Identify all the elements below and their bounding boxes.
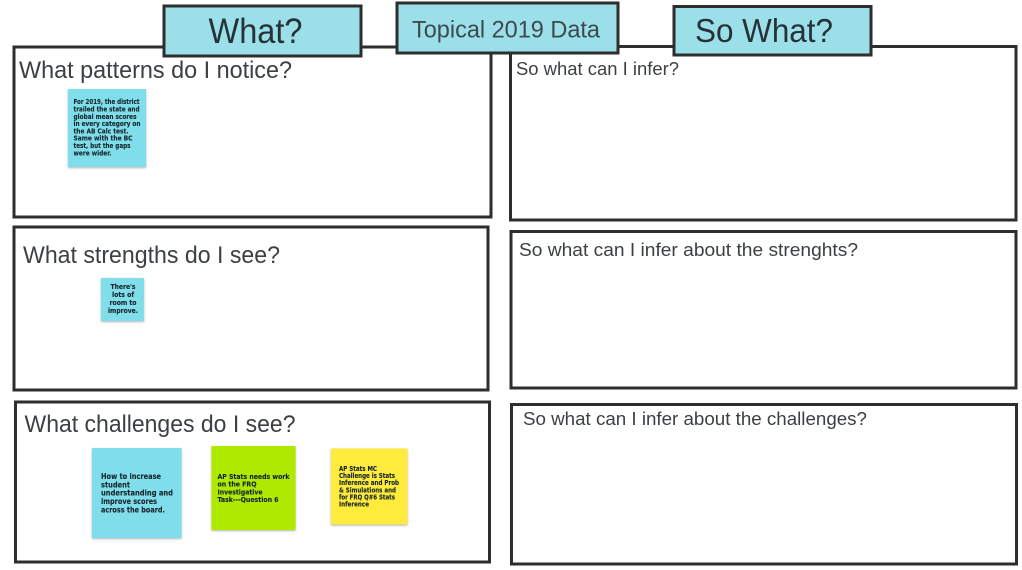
sticky note: FRQ question 6: Task---Question 6 — [218, 496, 279, 504]
sticky note: FRQ question 6: on the FRQ — [218, 481, 257, 489]
panel: infer about strengths — [511, 232, 1016, 388]
tab: So What?: So What? — [695, 12, 833, 49]
sticky note: room to improve — [101, 278, 144, 321]
sticky note: increase understanding: student — [101, 480, 130, 489]
sticky note: district trailed — [68, 89, 146, 167]
sticky note: stats MC challenge: Inference and Prob — [339, 479, 399, 487]
sticky note: stats MC challenge: & Simulations and — [339, 486, 396, 494]
sticky note: stats MC challenge — [331, 448, 408, 524]
sticky note: increase understanding: across the board. — [101, 505, 165, 514]
heading: what strengths: What strengths do I see? — [23, 242, 280, 269]
sticky note: FRQ question 6: Investigative — [218, 488, 263, 496]
panel: what strengths — [14, 227, 488, 390]
sticky note: room to improve: room to — [110, 299, 137, 307]
sticky note: increase understanding — [92, 448, 182, 538]
heading: what patterns: What patterns do I notice? — [19, 57, 292, 84]
sticky note: stats MC challenge: Inference — [339, 500, 369, 508]
tab: So What? — [674, 6, 871, 55]
sticky note: district trailed: Same with the BC — [74, 135, 133, 143]
panel: infer about challenges — [512, 404, 1016, 564]
sticky note: district trailed: trailed the state and — [74, 105, 140, 113]
tab: What?: What? — [208, 11, 302, 51]
sticky note: room to improve: improve. — [108, 307, 138, 315]
heading: what challenges: What challenges do I see? — [24, 411, 296, 438]
sticky note: stats MC challenge: Challenge is Stats — [339, 472, 395, 480]
heading: infer strengths: So what can I infer about the strenghts? — [519, 239, 858, 260]
sticky note: room to improve: There's — [110, 283, 136, 291]
tab: What? — [164, 6, 361, 56]
sticky note: stats MC challenge: AP Stats MC — [339, 465, 377, 473]
heading: infer challenges: So what can I infer about the challenges? — [523, 408, 867, 429]
sticky note: room to improve: lots of — [112, 291, 135, 299]
sticky note: district trailed: were wider. — [74, 149, 112, 157]
sticky note: increase understanding: How to increase — [101, 472, 161, 481]
sticky note: district trailed: test, but the gaps — [74, 142, 130, 150]
sticky note: district trailed: in every category on — [74, 120, 141, 128]
tab: Topical 2019 Data: Topical 2019 Data — [412, 16, 601, 44]
sticky note: stats MC challenge: for FRQ Q#6 Stats — [339, 493, 395, 501]
panel: what patterns — [14, 47, 491, 217]
panel: what challenges — [16, 402, 490, 562]
sticky note: FRQ question 6 — [212, 446, 296, 530]
sticky note: increase understanding: understanding and — [101, 489, 173, 498]
heading: infer: So what can I infer? — [516, 58, 679, 79]
panel: so what can I infer — [510, 46, 1016, 220]
sticky note: district trailed: global mean scores — [74, 113, 136, 121]
tab: Topical 2019 Data — [397, 3, 618, 53]
sticky note: FRQ question 6: AP Stats needs work — [218, 473, 290, 481]
sticky note: district trailed: For 2019, the district — [74, 98, 140, 106]
sticky note: district trailed: the AB Calc test. — [74, 127, 128, 135]
sticky note: increase understanding: improve scores — [101, 497, 157, 506]
